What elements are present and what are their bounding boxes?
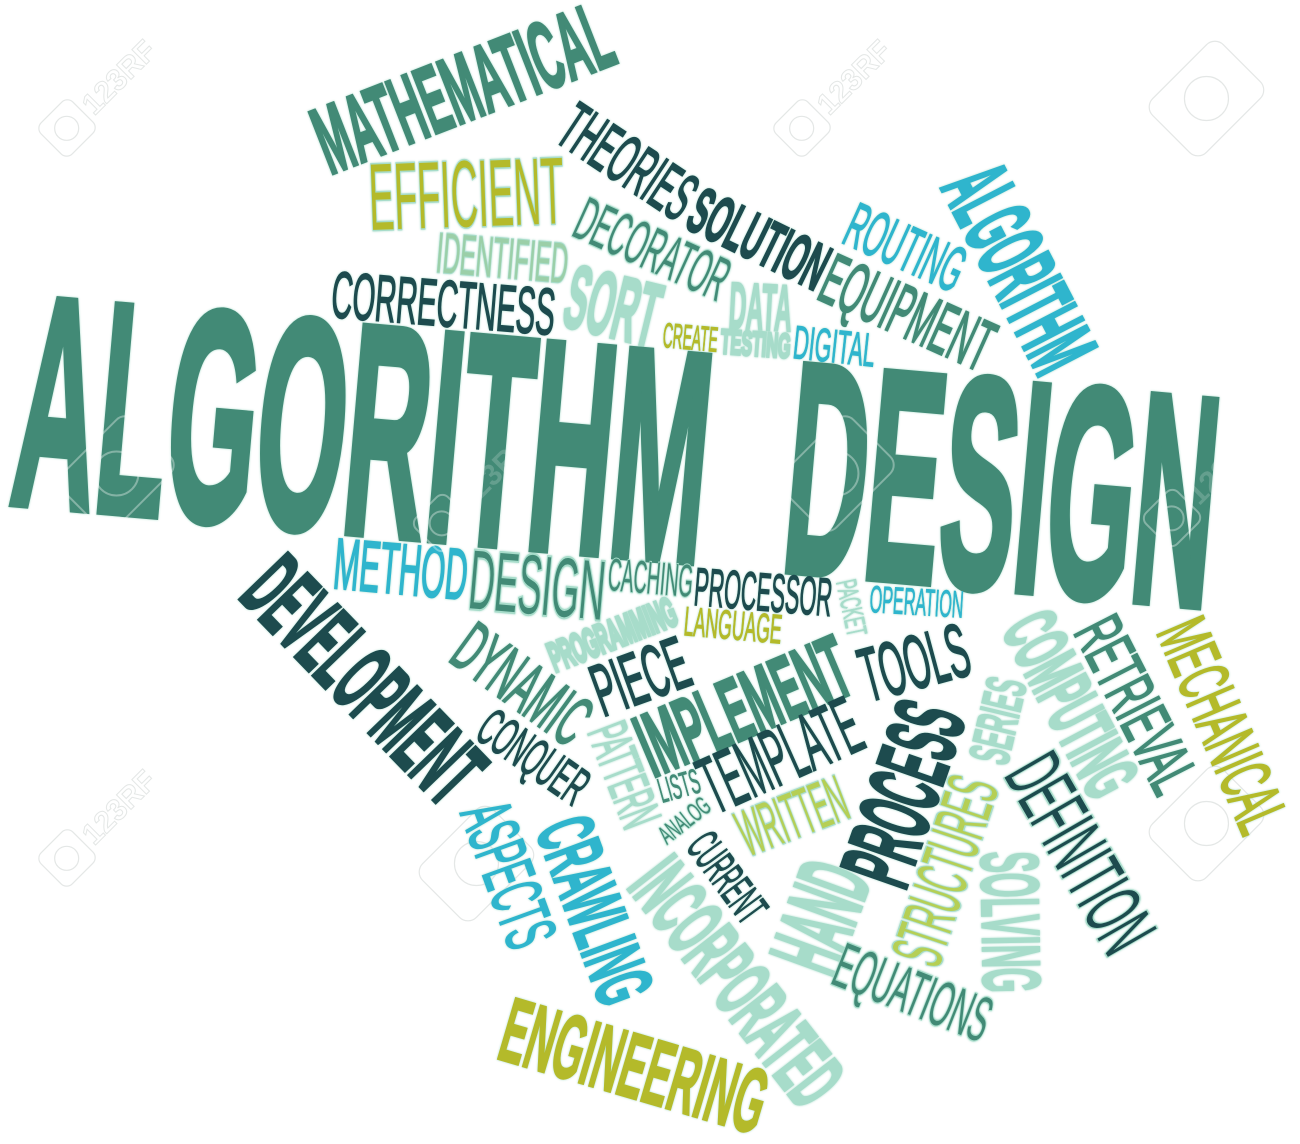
word cloud: DATA — [727, 268, 794, 345]
watermark: top right — [1144, 36, 1269, 161]
watermark over title: centre left: 123RF — [451, 429, 538, 516]
word: RETRIEVAL: RETRIEVAL — [1060, 604, 1212, 805]
word: PACKET: PACKET — [829, 577, 872, 639]
watermark over title: right — [1141, 419, 1271, 549]
watermark: lower left — [36, 759, 166, 889]
watermark: top centre: 123RF — [811, 34, 898, 121]
watermark: top left: 123RF — [76, 34, 163, 121]
word cloud: WRITTEN — [726, 761, 858, 870]
word cloud: COMPUTING — [986, 597, 1156, 811]
word: CONQUER: CONQUER — [466, 698, 600, 817]
word: CURRENT: CURRENT — [677, 821, 778, 933]
word: DYNAMIC: DYNAMIC — [438, 608, 606, 761]
word cloud: EQUIPMENT — [808, 240, 1006, 387]
word cloud: PATTERN — [575, 714, 673, 837]
watermark over title: right: 123RF — [1181, 424, 1268, 511]
watermark: lower left: 123RF — [76, 764, 163, 851]
word cloud: DECORATOR — [564, 185, 740, 315]
word: PIECE: PIECE — [580, 621, 701, 732]
word cloud: CREATE — [661, 316, 719, 360]
word cloud: PROCESS — [820, 688, 987, 899]
word cloud: EFFICIENT — [367, 138, 566, 251]
word cloud: CORRECTNESS — [329, 257, 558, 349]
word cloud: SORT — [555, 247, 670, 367]
word cloud: IMPLEMENT — [622, 618, 865, 796]
watermark: lower centre — [414, 801, 539, 926]
word cloud: TESTING — [719, 323, 792, 366]
word cloud: OPERATION — [868, 579, 965, 627]
word cloud: LANGUAGE — [682, 598, 784, 653]
watermark: lower right — [1144, 761, 1269, 886]
word cloud: ASPECTS — [445, 791, 571, 958]
word cloud: ALGORITHM — [921, 147, 1116, 389]
word cloud: HAND — [749, 847, 893, 988]
word cloud: DEVELOPMENT — [222, 535, 507, 825]
word cloud: IDENTIFIED — [434, 221, 571, 296]
word cloud: METHOD — [331, 524, 471, 616]
watermark over title: centre right — [774, 411, 899, 536]
watermark: top centre — [771, 29, 901, 159]
word: ANALOG: ANALOG — [652, 790, 716, 850]
word cloud: SOLUTION — [677, 173, 841, 304]
watermark over title: left — [54, 411, 179, 536]
word cloud: LISTS — [654, 762, 705, 811]
word cloud: SERIES — [957, 672, 1040, 770]
watermark over title: centre left — [411, 424, 541, 554]
word cloud: EQUATIONS — [824, 929, 1002, 1056]
word cloud: STRUCTURES — [877, 767, 1014, 975]
word cloud: ROUTING — [834, 189, 977, 306]
word cloud: PROGRAMMING — [541, 589, 683, 680]
word cloud: PROCESSOR — [692, 557, 834, 628]
word cloud: DESIGN — [465, 532, 609, 638]
word: THEORIES: THEORIES — [545, 89, 711, 235]
word cloud: TOOLS — [850, 608, 979, 718]
word cloud: TEMPLATE — [685, 680, 876, 831]
watermark: top left — [36, 29, 166, 159]
word cloud: CACHING — [606, 548, 695, 607]
word cloud: DIGITAL — [791, 315, 878, 377]
